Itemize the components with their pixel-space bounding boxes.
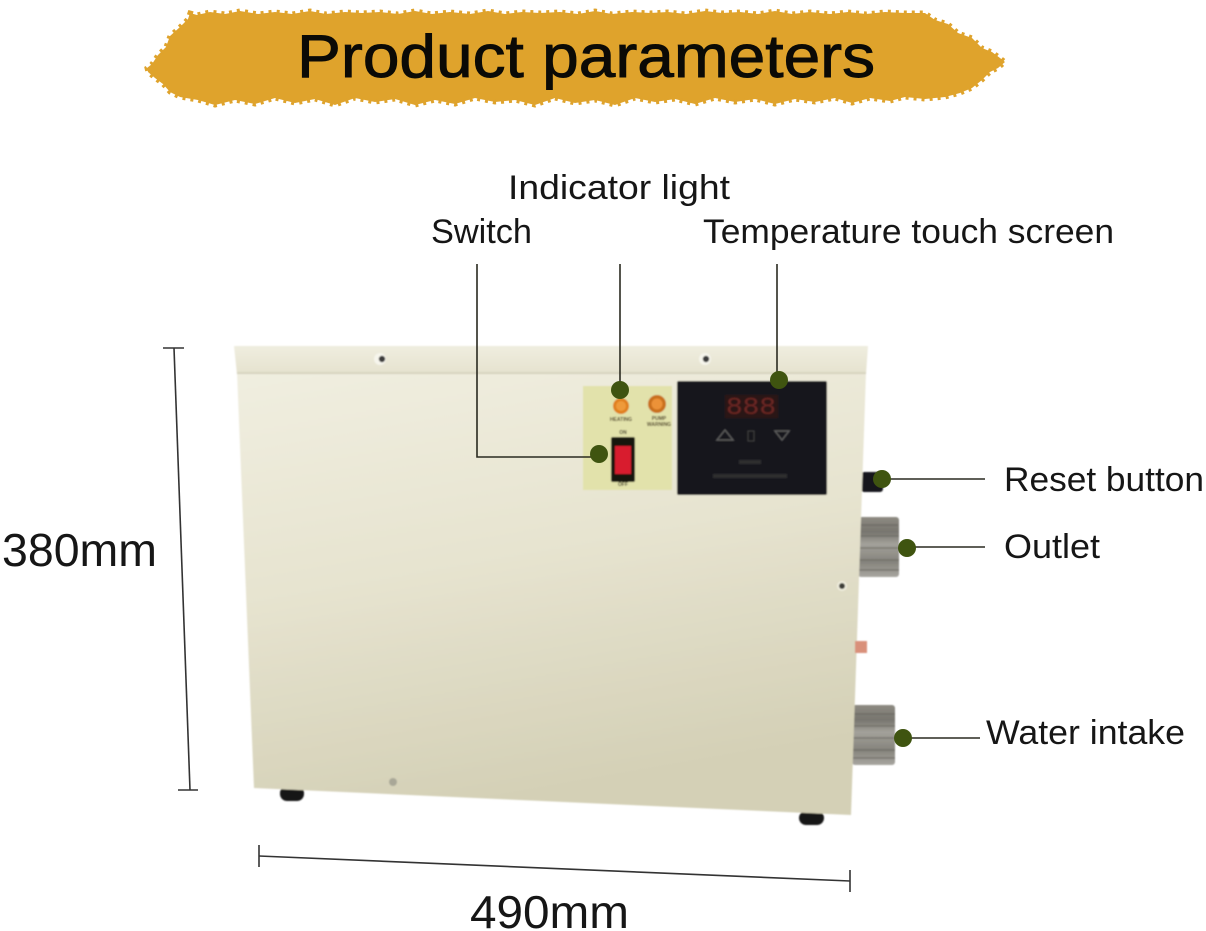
height dimension label: 380mm [2,524,157,576]
screen caption [739,460,761,464]
LED display [725,395,778,418]
side and bottom screws [389,581,847,786]
label: indicator light: Indicator light [508,169,731,207]
indicator lamps [613,398,629,414]
callout dots [590,371,916,747]
rocker switch [611,437,635,482]
cabinet body [237,372,866,815]
water intake pipe [852,705,895,765]
reset button stub [861,472,883,492]
label: reset button: Reset button [1004,461,1204,499]
width dimension line [259,845,850,892]
label: outlet: Outlet [1004,528,1101,566]
cabinet lid [234,346,868,374]
label: water intake: Water intake [986,714,1185,752]
control panel [583,386,672,490]
touch keys [717,430,733,440]
temperature touch screen: 888 [726,395,776,422]
control panel: ON [619,430,627,436]
control panel: WARNING [647,422,671,428]
rubber feet [280,786,824,825]
label: switch: Switch [431,213,532,251]
temperature touch screen [677,381,827,495]
outlet pipe [858,517,899,577]
control panel: OFF [618,482,628,488]
title text: Product parameters [297,23,875,90]
control panel: PUMP [652,416,667,422]
callout lines [477,264,985,738]
height dimension line [163,348,198,790]
control panel: HEATING [610,417,632,423]
label: temperature touch screen: Temperature touch screen [703,213,1114,251]
title banner [147,11,1005,105]
lid screws [374,353,711,365]
small red label [855,641,867,653]
product: water heater [234,346,899,825]
brush stroke background [147,11,1005,105]
